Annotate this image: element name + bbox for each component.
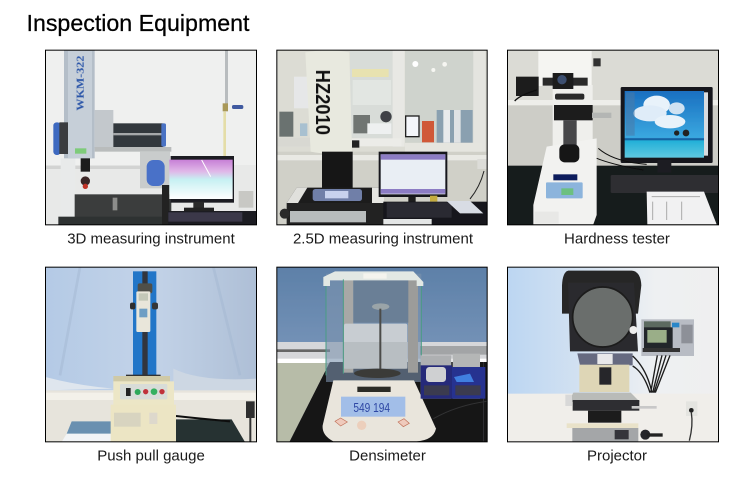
lettering: WKM-322: WKM-322 [76, 56, 87, 111]
panel: Densimeter photo [277, 267, 487, 442]
caption: Projector: Projector [587, 448, 647, 464]
panel: Hardness tester photo [507, 50, 719, 225]
caption: 3D measuring instrument: 3D measuring instrument [67, 230, 236, 248]
scale readout: 549 194 [353, 401, 390, 415]
panel: Projector photo [507, 267, 719, 442]
panel: 3D measuring instrument photo [45, 50, 257, 225]
caption: Push pull gauge: Push pull gauge [97, 448, 205, 464]
caption: Densimeter: Densimeter [349, 448, 426, 464]
title: Inspection Equipment [26, 10, 250, 36]
caption: Hardness tester: Hardness tester [564, 230, 670, 248]
lettering: HZ2010: HZ2010 [311, 70, 334, 135]
caption: 2.5D measuring instrument: 2.5D measuring instrument [293, 230, 474, 248]
panel: Push pull gauge photo [45, 267, 257, 442]
panel: 2.5D measuring instrument photo [277, 50, 487, 225]
